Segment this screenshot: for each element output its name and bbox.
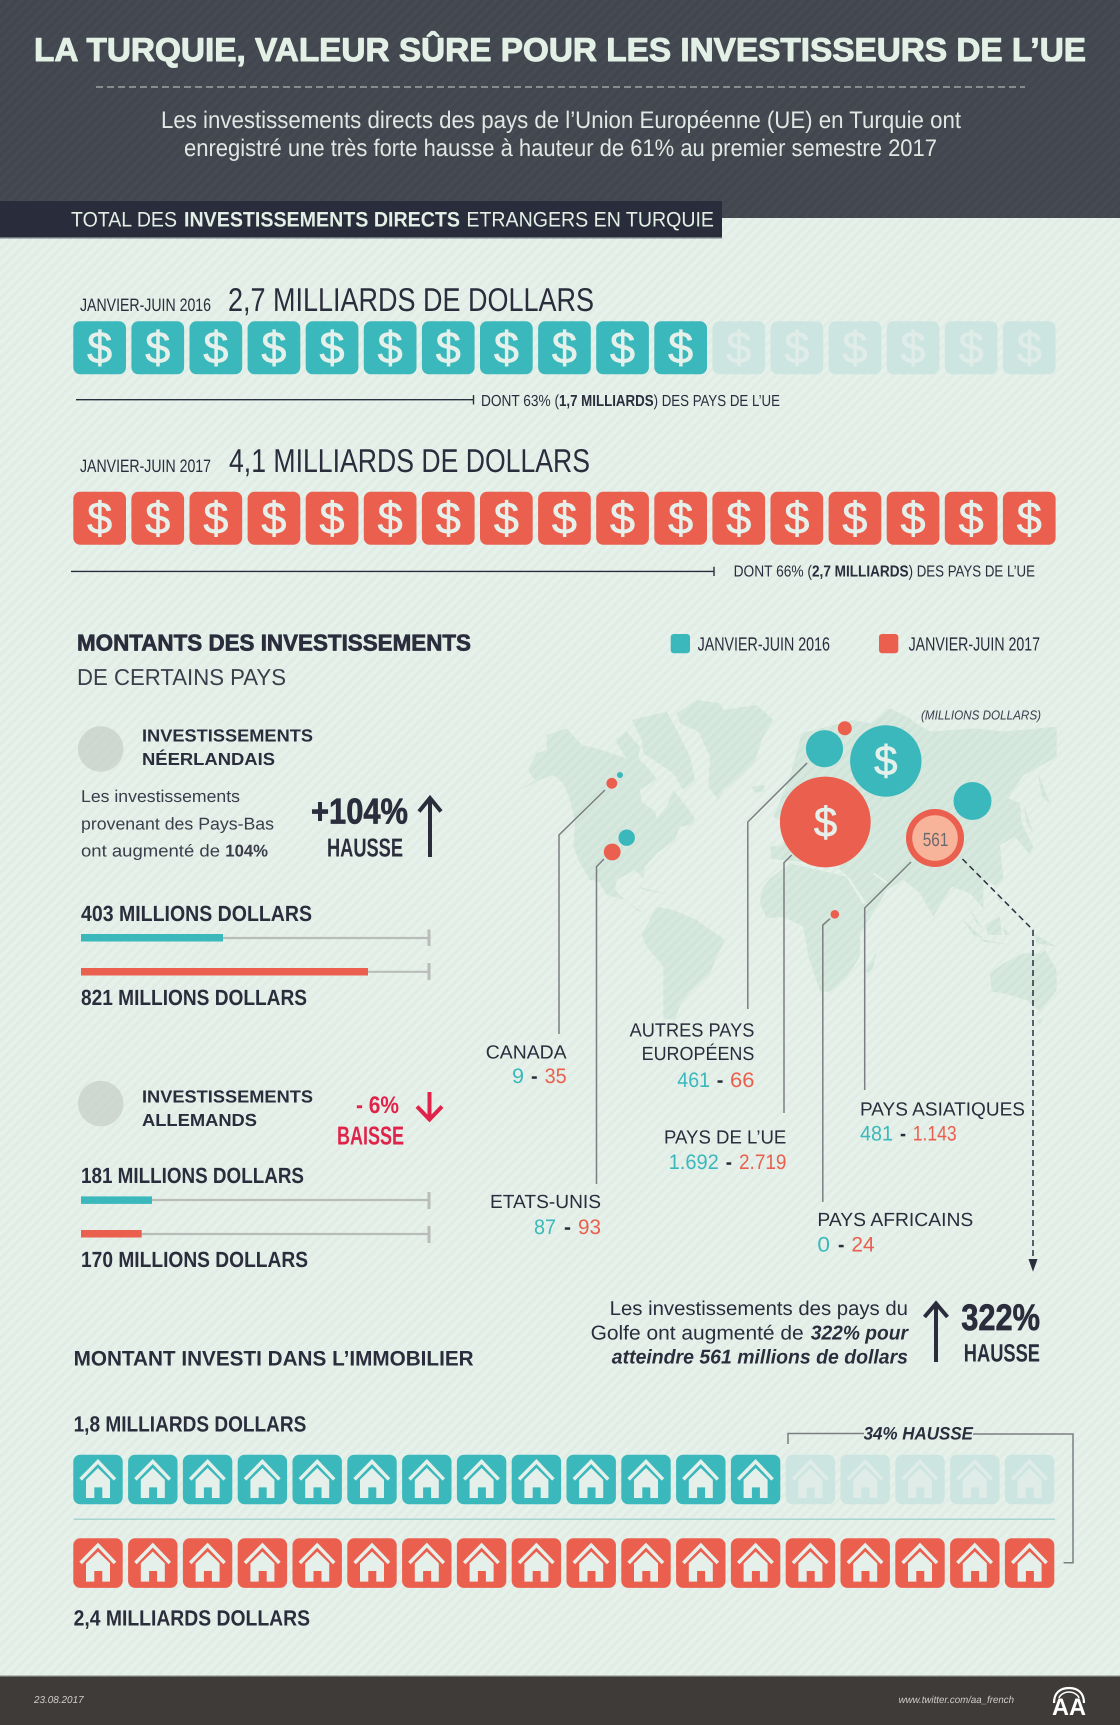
change: +104%: HAUSSE — [327, 833, 403, 863]
label: pays africains: - — [838, 1234, 844, 1257]
dollar icons 2017: $ — [203, 492, 228, 544]
change: 322%: HAUSSE — [964, 1340, 1040, 1368]
bubble: pays africains — [830, 910, 839, 919]
dashed arrow to gulf callout — [962, 859, 1038, 1272]
label: pays asiatiques: - — [900, 1123, 906, 1146]
panel: immobilier — [73, 1348, 1073, 1631]
EU share line 2017 — [71, 563, 1035, 580]
house icons red — [73, 1538, 1054, 1588]
label: autres pays européens — [630, 1021, 754, 1092]
bubble: pays du Golfe 561 — [906, 809, 964, 867]
panel heading — [142, 1086, 313, 1130]
dollar icons 2016: $ — [378, 322, 403, 373]
heading: montants des investissements: MONTANTS DES INVESTISSEMENTS — [77, 630, 471, 656]
label: canada: 9 — [512, 1065, 524, 1088]
dollar icons 2016: $ — [959, 322, 984, 373]
bubble: pays asiatiques 2016 — [954, 782, 992, 820]
panel heading — [142, 726, 313, 769]
dollar icons 2017: $ — [552, 492, 577, 544]
heading: MONTANT INVESTI DANS L’IMMOBILIER — [74, 1348, 474, 1371]
change: 322%: 322% — [961, 1297, 1040, 1338]
dollar icons 2017: $ — [320, 492, 345, 544]
description: provenant des Pays-Bas — [81, 814, 274, 834]
dollar icons 2017: $ — [959, 492, 984, 544]
dollar icons 2017: $ — [261, 492, 286, 544]
panel heading: INVESTISSEMENTS — [142, 726, 313, 746]
description — [81, 787, 274, 861]
amount 2017: 4,1 MILLIARDS DE DOLLARS — [229, 442, 590, 479]
description: 104% — [225, 842, 268, 861]
bubble: pays du Golfe 561: 561 — [923, 830, 948, 851]
label: etats-unis: 87 — [534, 1216, 556, 1239]
dollar icons 2016: $ — [668, 322, 693, 373]
panel: janvier-juin 2017 — [71, 442, 1056, 580]
label: autres pays européens: 461 — [677, 1069, 710, 1092]
amount 2,4: 2,4 MILLIARDS DOLLARS — [74, 1606, 310, 1631]
change: 322% — [961, 1297, 1040, 1368]
period label 2017: JANVIER-JUIN 2017 — [80, 456, 211, 476]
label: pays asiatiques: 481 — [860, 1123, 893, 1146]
EU share line 2016: DONT 63% ( — [481, 393, 560, 410]
label: autres pays européens: 66 — [730, 1069, 754, 1092]
callout text: Les investissements des pays du — [610, 1298, 908, 1320]
dollar icons 2016: $ — [494, 322, 519, 373]
change: +104%: +104% — [311, 791, 408, 832]
EU share line 2017: ) DES PAYS DE L’UE — [909, 563, 1035, 580]
callout text: atteindre 561 millions de dollars — [612, 1346, 908, 1368]
label: pays de l'UE: PAYS DE L’UE — [664, 1128, 786, 1149]
dollar icons 2017: $ — [842, 492, 867, 544]
bars 181 vs 170 — [81, 1163, 429, 1272]
label: pays de l'UE — [664, 1128, 786, 1174]
flag placeholder — [78, 1081, 123, 1126]
callout text — [591, 1298, 909, 1368]
section tab: total des investissements: TOTAL DES — [71, 208, 177, 231]
section tab: total des investissements: ETRANGERS EN TURQUIE — [466, 208, 714, 231]
unit note: (MILLIONS DOLLARS) — [921, 707, 1041, 722]
label: etats-unis — [490, 1192, 601, 1239]
source url: www.twitter.com/aa_french — [899, 1695, 1014, 1706]
label: pays de l'UE: 2.719 — [739, 1151, 786, 1174]
bars 181 vs 170: 170 MILLIONS DOLLARS — [81, 1247, 308, 1272]
subtitle: Les investissements directs des pays de l’Union Européenne (UE) en Turquie ont — [161, 107, 961, 134]
panel: janvier-juin 2016 — [73, 281, 1056, 410]
dollar icons 2016: $ — [436, 322, 461, 373]
dollar icons 2016: $ — [261, 322, 286, 373]
bracket: 34% hausse — [788, 1423, 1073, 1563]
title: LA TURQUIE, VALEUR SÛRE POUR LES INVESTISSEURS DE L’UE — [34, 31, 1086, 68]
arrow down — [417, 1092, 442, 1120]
dollar icons 2016: $ — [1017, 322, 1042, 373]
leader lines — [559, 763, 911, 1202]
subtitle — [161, 107, 961, 162]
bubble: pays de l'UE 2017: $ — [814, 798, 837, 846]
heading: montants des investissements: DE CERTAINS PAYS — [77, 664, 286, 690]
change: -6%: - 6% — [356, 1092, 399, 1119]
dollar icons 2017: $ — [726, 492, 751, 544]
date: 23.08.2017 — [33, 1695, 84, 1706]
legend: JANVIER-JUIN 2017 — [909, 635, 1040, 656]
bars 403 vs 821: 403 MILLIONS DOLLARS — [81, 901, 312, 926]
legend — [671, 634, 1040, 656]
change: -6% — [337, 1092, 404, 1151]
dollar icons 2016: $ — [610, 322, 635, 373]
bubble: canada — [606, 772, 623, 789]
amount 1,8: 1,8 MILLIARDS DOLLARS — [74, 1412, 306, 1437]
dollar icons 2017: $ — [610, 492, 635, 544]
label: canada — [486, 1042, 567, 1088]
label: pays africains: PAYS AFRICAINS — [817, 1210, 973, 1231]
bubble: pays de l'UE 2016: $ — [874, 737, 897, 784]
label: pays asiatiques: PAYS ASIATIQUES — [860, 1099, 1025, 1120]
label: pays africains — [817, 1210, 973, 1257]
heading: montants des investissements — [77, 630, 471, 690]
EU share line 2017: 2,7 MILLIARDS — [812, 563, 909, 580]
change: +104% — [311, 791, 408, 863]
dollar icons 2016: $ — [842, 322, 867, 373]
house icons teal — [73, 1455, 1054, 1504]
callout text: 322% pour — [811, 1322, 909, 1344]
amount 2016: 2,7 MILLIARDS DE DOLLARS — [228, 281, 594, 318]
bars 403 vs 821 — [81, 901, 429, 1010]
bubble: pays de l'UE 2016 — [850, 725, 922, 797]
dollar icons 2016 — [73, 321, 1056, 374]
label: etats-unis: 93 — [578, 1216, 601, 1239]
dollar icons 2017: $ — [436, 492, 461, 544]
label: autres pays européens: - — [717, 1069, 723, 1092]
bubble: etats-unis — [604, 830, 635, 860]
dollar icons 2016: $ — [87, 322, 112, 373]
description: Les investissements — [81, 787, 240, 806]
dollar icons 2016: $ — [901, 322, 926, 373]
EU share line 2016: 1,7 MILLIARDS — [559, 393, 654, 410]
dollar icons 2017: $ — [784, 492, 809, 544]
logo: AA: AA — [1052, 1694, 1086, 1721]
label: etats-unis: ETATS-UNIS — [490, 1192, 601, 1213]
description: ont augmenté de — [81, 842, 220, 861]
panel: investissements allemands — [78, 1081, 442, 1272]
bars 403 vs 821: 821 MILLIONS DOLLARS — [81, 985, 307, 1010]
panel: investissements néerlandais — [78, 726, 441, 1010]
change: -6%: BAISSE — [337, 1121, 404, 1151]
dollar icons 2016: $ — [726, 322, 751, 373]
dollar icons 2017: $ — [145, 492, 170, 544]
dollar icons 2016: $ — [784, 322, 809, 373]
EU share line 2017: DONT 66% ( — [734, 563, 813, 580]
label: canada: 35 — [545, 1065, 567, 1088]
legend: JANVIER-JUIN 2016 — [698, 635, 830, 656]
arrow up — [924, 1304, 948, 1362]
bars 181 vs 170: 181 MILLIONS DOLLARS — [81, 1163, 304, 1188]
callout: pays du Golfe — [591, 1297, 1040, 1368]
panel heading: NÉERLANDAIS — [142, 749, 275, 769]
footer — [0, 1676, 1120, 1725]
EU share line 2016: ) DES PAYS DE L’UE — [654, 393, 780, 410]
label: pays asiatiques: 1.143 — [913, 1123, 957, 1146]
header band — [0, 0, 1120, 218]
dollar icons 2016: $ — [203, 322, 228, 373]
dollar icons 2016: $ — [320, 322, 345, 373]
subtitle: enregistré une très forte hausse à hauteur de 61% au premier semestre 2017 — [184, 135, 937, 162]
dollar icons 2017: $ — [901, 492, 926, 544]
label: pays de l'UE: 1.692 — [669, 1151, 719, 1174]
label: canada: CANADA — [486, 1042, 567, 1063]
dollar icons 2017: $ — [87, 492, 112, 544]
dollar icons 2016: $ — [145, 322, 170, 373]
section tab: total des investissements: INVESTISSEMENTS DIRECTS — [184, 208, 460, 231]
label: canada: - — [531, 1065, 538, 1088]
dollar icons 2017: $ — [1017, 492, 1042, 544]
bubble: pays de l'UE 2017 — [780, 777, 871, 867]
world map — [520, 700, 1057, 1025]
label: pays de l'UE: - — [726, 1151, 732, 1174]
dollar icons 2016: $ — [552, 322, 577, 373]
dollar icons 2017: $ — [668, 492, 693, 544]
flag placeholder — [78, 726, 123, 772]
label: etats-unis: - — [564, 1216, 571, 1239]
section tab: total des investissements — [0, 201, 722, 238]
label: autres pays européens: EUROPÉENS — [642, 1043, 754, 1065]
callout text: Golfe ont augmenté de — [591, 1322, 804, 1344]
dollar icons 2017: $ — [378, 492, 403, 544]
EU share line 2016 — [76, 393, 780, 410]
label: pays africains: 24 — [851, 1234, 875, 1257]
panel heading: INVESTISSEMENTS — [142, 1086, 313, 1106]
dollar icons 2017 — [73, 492, 1056, 545]
arrow up — [419, 798, 441, 857]
label: pays africains: 0 — [817, 1234, 830, 1257]
label: pays asiatiques — [860, 1099, 1025, 1146]
dollar icons 2017: $ — [494, 492, 519, 544]
bubble: autres pays européens — [806, 721, 852, 767]
period label 2016: JANVIER-JUIN 2016 — [80, 295, 211, 315]
panel heading: ALLEMANDS — [142, 1110, 257, 1130]
label: autres pays européens: AUTRES PAYS — [630, 1021, 754, 1042]
bracket: 34% hausse: 34% HAUSSE — [864, 1423, 974, 1443]
